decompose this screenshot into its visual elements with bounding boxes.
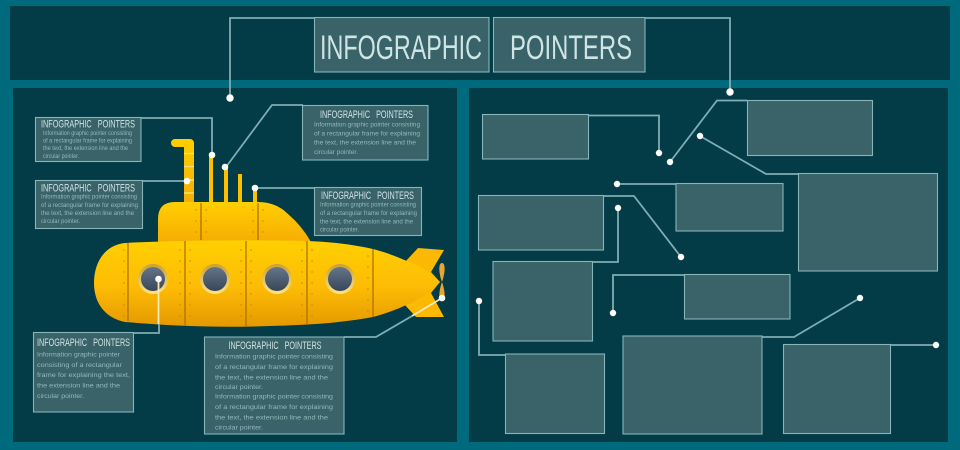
panel: header [10, 6, 950, 80]
empty pointer 10 [697, 133, 938, 271]
empty pointer 9 [667, 100, 872, 165]
pointer callout: rear mast: the text, the extension line and the [320, 218, 413, 226]
title pointer left [226, 18, 315, 102]
pointer callout: periscope mast [36, 118, 215, 162]
porthole 3 [262, 264, 292, 294]
pointer callout: periscope mast: INFOGRAPHIC POINTERS [41, 118, 135, 130]
pointer callout: periscope mast: the text, the extension line and the [43, 145, 128, 152]
porthole 1 [138, 264, 168, 294]
pointer callout: rear mast: Information graphic pointer consisting [320, 202, 416, 208]
title box: infographic [314, 18, 489, 72]
title box: pointers [494, 18, 645, 72]
pointer callout: porthole: INFOGRAPHIC POINTERS [37, 337, 130, 349]
pointer callout: porthole: consisting of a rectangular [37, 362, 123, 369]
pointer callout: propeller: the text, the extension line and the [215, 414, 328, 422]
pointer callout: second mast: Information graphic pointer consisting [314, 122, 420, 128]
pointer callout: propeller: the text, the extension line and the [215, 374, 328, 382]
pointer callout: periscope mast: Information graphic pointer consisting [43, 130, 132, 137]
pointer callout: periscope: Information graphic pointer consisting [41, 194, 137, 200]
pointer callout: second mast: of a rectangular frame for explaining [314, 130, 420, 138]
title box: infographic: INFOGRAPHIC [320, 29, 482, 67]
pointer callout: second mast: INFOGRAPHIC POINTERS [320, 109, 413, 121]
pointer callout: propeller: circular pointer. [215, 424, 263, 432]
porthole 4 [325, 264, 355, 294]
pointer callout: rear mast: INFOGRAPHIC POINTERS [321, 190, 414, 202]
pointer callout: porthole: frame for explaining the text, [37, 372, 130, 379]
pointer callout: periscope mast: of a rectangular frame for explaining [43, 138, 132, 144]
pointer callout: periscope: of a rectangular frame for explaining [41, 202, 138, 209]
empty pointer 5 [610, 274, 790, 319]
hull seams and rivets [124, 203, 373, 327]
panel: submarine [13, 88, 457, 442]
pointer callout: periscope mast: circular pointer. [43, 153, 79, 160]
empty pointer 7 [623, 295, 863, 434]
portholes [138, 264, 355, 294]
pointer callout: porthole: the extension line and the [37, 382, 120, 390]
title [226, 18, 734, 102]
hull [94, 240, 440, 327]
pointer callout: propeller: of a rectangular frame for explaining [215, 364, 333, 371]
conning tower [158, 202, 311, 242]
pointer callout: second mast: circular pointer. [314, 149, 358, 156]
empty pointer 3 [614, 181, 783, 231]
pointer callout: propeller [204, 295, 445, 434]
title pointer right [645, 18, 734, 96]
pointer callout: periscope [36, 178, 190, 228]
pointer callout: propeller: Information graphic pointer consisting [215, 354, 333, 360]
pointer callout: second mast [222, 105, 428, 170]
empty pointer 4 [493, 205, 621, 341]
empty pointer 1 [482, 114, 662, 159]
pointer callout: porthole: Information graphic pointer [37, 352, 121, 358]
pointer callout: propeller: of a rectangular frame for explaining [215, 404, 333, 411]
pointer callout: rear mast: of a rectangular frame for explaining [320, 210, 417, 217]
pointer callout: porthole [34, 276, 162, 412]
pointer callout: porthole: circular pointer. [37, 393, 84, 400]
pointer callout: propeller: Information graphic pointer consisting [215, 394, 333, 400]
pointer callout: periscope: INFOGRAPHIC POINTERS [41, 182, 135, 194]
propeller [439, 263, 445, 301]
pointer callout: rear mast: circular pointer. [320, 226, 359, 234]
pointer callout: second mast: the text, the extension line and the [314, 140, 416, 146]
pointer callout: periscope: the text, the extension line and the [41, 210, 134, 217]
tail fins [404, 248, 444, 317]
pointer callout: propeller: circular pointer. [215, 384, 263, 391]
empty pointer 8 [784, 342, 939, 434]
periscope [171, 139, 194, 202]
panel: empty pointers [469, 88, 948, 442]
title box: pointers: POINTERS [510, 29, 632, 67]
empty pointer 2 [478, 196, 684, 260]
pointer callout: rear mast [252, 185, 422, 236]
pointer callout: periscope: circular pointer. [41, 218, 80, 225]
illustration: yellow submarine [94, 139, 445, 327]
pointer callout: propeller: INFOGRAPHIC POINTERS [228, 340, 322, 352]
porthole 2 [200, 264, 230, 294]
empty pointer 6 [476, 298, 604, 434]
masts [209, 155, 257, 203]
